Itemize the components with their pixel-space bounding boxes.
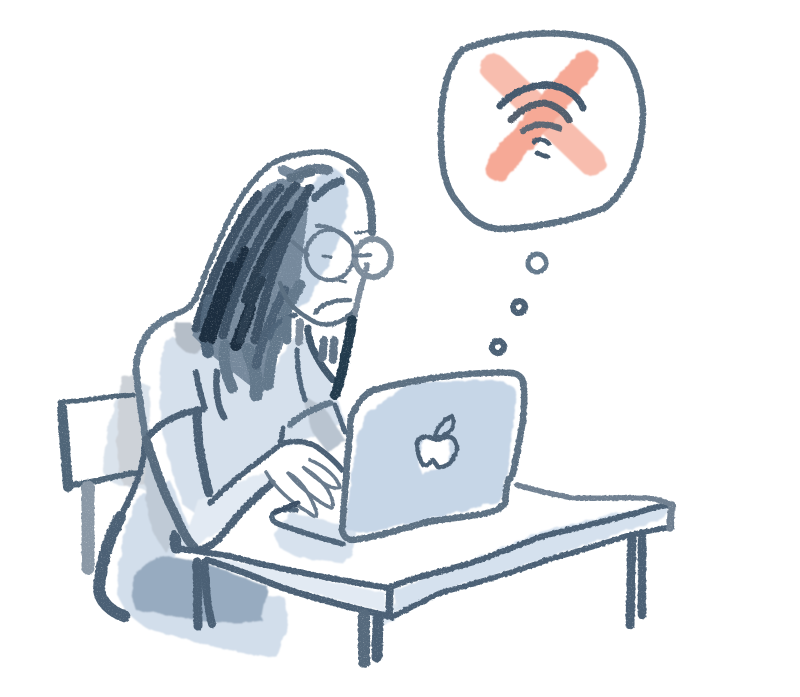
small thought circles bbox=[492, 254, 546, 353]
woman: shoulder, back and arms bbox=[99, 316, 342, 616]
woman: hand on keyboard bbox=[266, 460, 343, 544]
icon: apple logo bbox=[417, 416, 457, 467]
woman: hair bbox=[192, 169, 341, 395]
table bbox=[174, 485, 672, 617]
watercolor washes: figure, chair and skirt bbox=[103, 167, 668, 657]
woman: head outline and face bbox=[170, 152, 391, 324]
icon: red X bbox=[494, 64, 592, 168]
table legs bbox=[197, 535, 642, 662]
woman: neck and collar bbox=[270, 315, 352, 432]
bubble outline bbox=[441, 33, 643, 229]
thought bubble bbox=[441, 33, 643, 353]
icon: wifi arcs bbox=[500, 85, 583, 157]
chair bbox=[60, 395, 135, 568]
glasses bbox=[293, 226, 391, 280]
laptop bbox=[342, 373, 524, 540]
